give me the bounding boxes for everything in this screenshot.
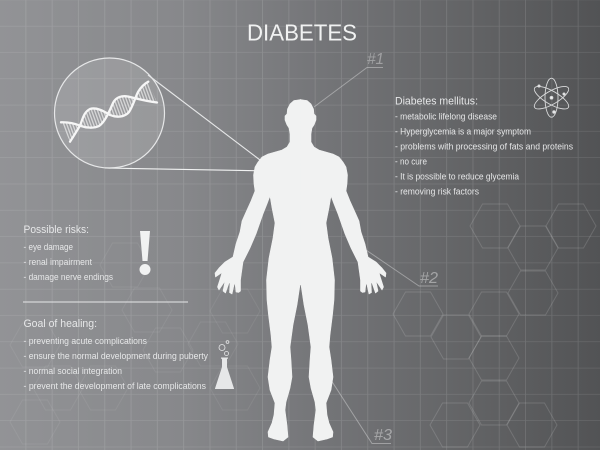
panel: Possible risks: - eye damage bbox=[24, 242, 73, 252]
panel: Goal of healing: - preventing acute complications bbox=[24, 336, 147, 346]
panel: Diabetes mellitus: - problems with processing of fats and proteins bbox=[395, 142, 573, 152]
icon: flask with bubbles bbox=[215, 341, 234, 389]
callout: #3 bbox=[331, 380, 392, 444]
magnifier: DNA circle with zoom lines bbox=[54, 58, 272, 171]
panel: Possible risks: Possible risks: bbox=[24, 224, 89, 236]
icon: exclamation mark bbox=[140, 231, 150, 275]
title: DIABETES bbox=[247, 20, 357, 46]
panel: Diabetes mellitus bbox=[395, 96, 573, 196]
panel: Diabetes mellitus: - removing risk factors bbox=[395, 186, 479, 196]
human body silhouette bbox=[215, 100, 386, 441]
panel: Diabetes mellitus: - It is possible to reduce glycemia bbox=[395, 172, 519, 182]
divider bbox=[23, 302, 188, 303]
callout: #2 bbox=[366, 250, 438, 287]
panel: Diabetes mellitus: Diabetes mellitus: bbox=[395, 96, 478, 108]
panel: Diabetes mellitus: - no cure bbox=[395, 156, 427, 166]
icon: atom bbox=[531, 78, 572, 117]
panel: Goal of healing: - normal social integration bbox=[24, 366, 122, 376]
callout: #1: #1 bbox=[367, 51, 384, 68]
panel: Possible risks bbox=[24, 224, 113, 282]
panel: Diabetes mellitus: - metabolic lifelong disease bbox=[395, 112, 497, 122]
callout: #1 bbox=[314, 51, 384, 107]
icon: DNA helix bbox=[61, 82, 157, 142]
panel: Diabetes mellitus: - Hyperglycemia is a major symptom bbox=[395, 126, 531, 136]
panel: Goal of healing: Goal of healing: bbox=[24, 318, 97, 330]
panel: Goal of healing bbox=[24, 318, 208, 391]
panel: Goal of healing: - ensure the normal development during puberty bbox=[24, 351, 208, 361]
callout: #3: #3 bbox=[374, 427, 392, 444]
callout: #2: #2 bbox=[420, 270, 438, 287]
panel: Goal of healing: - prevent the development of late complications bbox=[24, 381, 206, 391]
panel: Possible risks: - damage nerve endings bbox=[24, 272, 113, 282]
panel: Possible risks: - renal impairment bbox=[24, 257, 92, 267]
